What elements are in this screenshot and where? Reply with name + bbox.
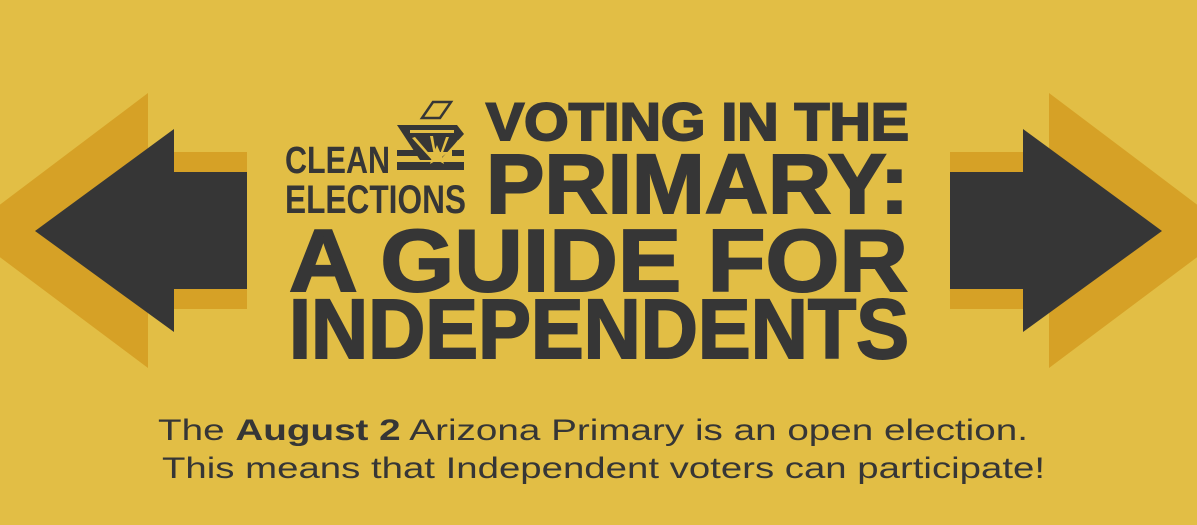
logo text: CLEAN [285,140,390,182]
icon: ballot box [397,102,464,170]
logo: Clean Elections [285,102,466,222]
logo: Clean Elections: ELECTIONS [285,178,466,222]
subtitle text: This means that Independent voters can participate! [162,452,1045,485]
title [289,93,909,376]
title: PRIMARY: [486,137,909,231]
subtitle text [158,414,1045,485]
title: VOTING IN THE [486,93,909,152]
title: A GUIDE FOR [289,211,908,310]
left arrow [0,93,247,368]
right arrow [950,93,1197,368]
subtitle text: The August 2 Arizona Primary is an open election. [158,414,1028,447]
title: INDEPENDENTS [289,282,909,376]
